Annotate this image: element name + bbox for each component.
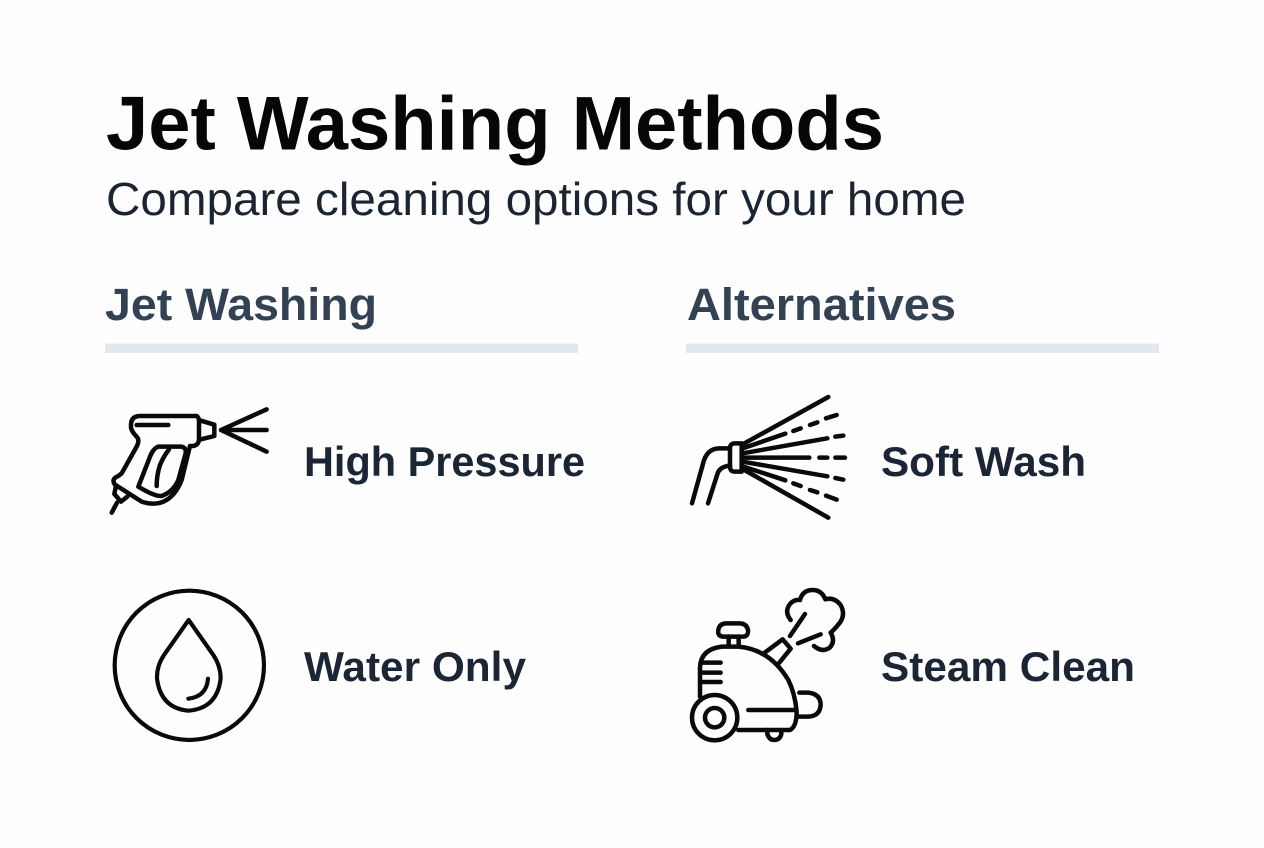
heading: alternatives: Alternatives — [687, 279, 956, 330]
label: soft wash: Soft Wash — [881, 438, 1086, 485]
label: high pressure: High Pressure — [304, 438, 585, 485]
label: water only: Water Only — [304, 643, 527, 690]
title: Jet Washing Methods — [106, 82, 884, 166]
heading underline — [105, 344, 578, 353]
subtitle: Compare cleaning options for your home — [106, 173, 966, 225]
icon: pressure washer gun — [112, 409, 267, 513]
label: steam clean: Steam Clean — [881, 643, 1135, 690]
icon: soft wash sprayer — [692, 397, 845, 518]
panel: alternatives — [686, 279, 1159, 740]
heading: jet washing: Jet Washing — [105, 279, 377, 330]
panel: jet washing — [105, 279, 585, 740]
icon: water drop in circle — [115, 591, 264, 740]
heading underline — [686, 344, 1159, 353]
icon: steam cleaner machine — [692, 590, 843, 740]
